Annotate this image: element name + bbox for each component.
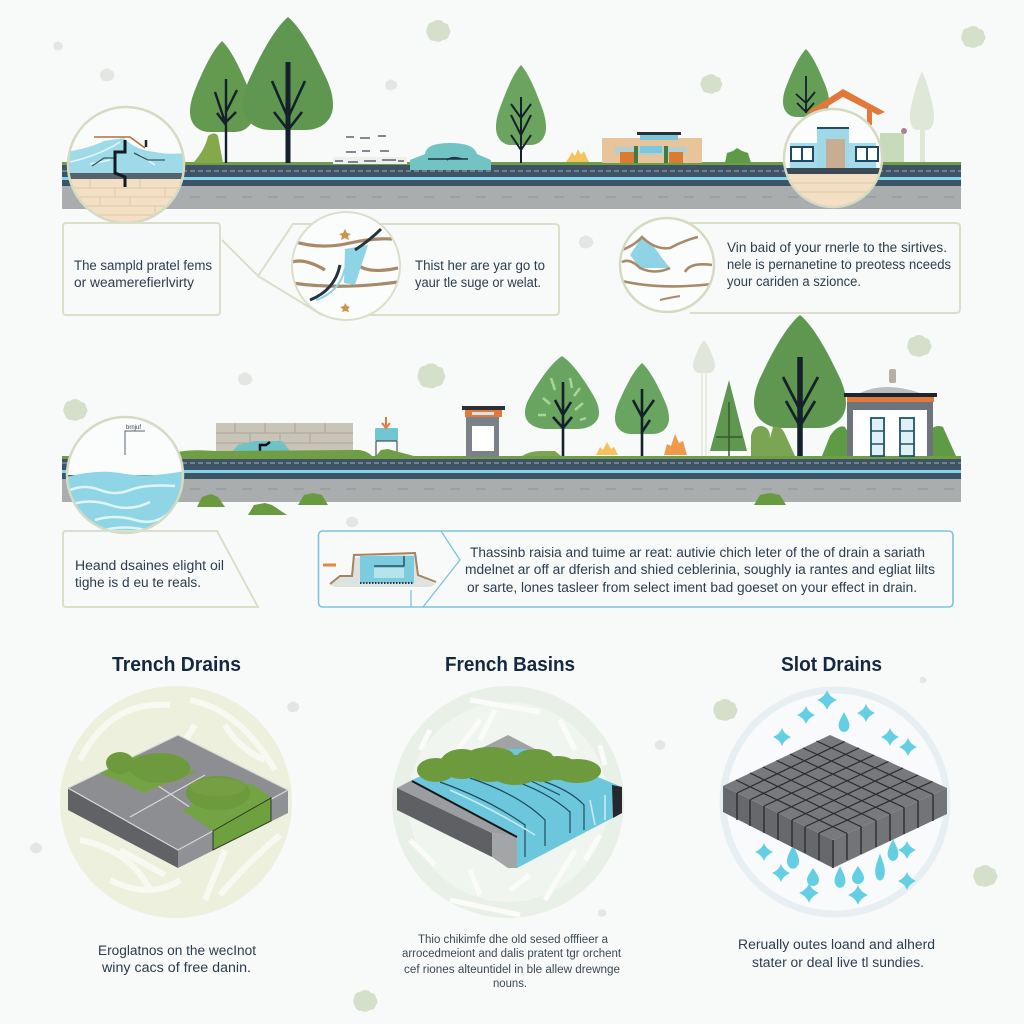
roadside bushes [197,493,786,515]
house [844,369,937,456]
swirl circle [392,686,624,918]
caption: arrocedmeiont and dalis pratent tgr orchent [402,948,622,960]
inset circle: water: brnjuf [126,425,141,431]
heading: Slot Drains [781,654,882,676]
inset circle: channel [290,210,402,322]
tree: pale [693,340,715,456]
box 3: callout with inset: your cariden a szionce. [727,274,861,289]
tree: left [190,41,254,163]
column: French Basins [392,654,624,990]
box 2: callout with pointer [222,210,559,322]
tree: triangle [710,380,747,456]
low building [602,132,702,163]
caption: stater or deal live tl sundies. [752,955,924,970]
orange roof [807,89,885,115]
scene 2 trees [522,315,956,456]
inset circle: water [66,416,184,534]
caption [402,934,622,990]
tree: big [754,315,846,456]
box 4: text callout: Heand dsaines elight oil [75,558,224,573]
teal mound [410,143,491,170]
box 1: text callout [63,223,220,315]
orange shrub [566,149,589,162]
green bush [725,148,751,163]
box 5: text callout with inset: or sarte, lones tasleer from select iment bad goeset on your effect in drain. [467,580,917,595]
box 5: text callout with inset: Thassinb raisia and tuime ar reat: autivie chich leter of the of drain a sariath [470,545,925,560]
caption: Rerually outes loand and alherd [738,937,935,952]
heading: Trench Drains [112,654,241,676]
caption: nouns. [493,978,527,990]
caption: Eroglatnos on the wecInot [98,943,256,958]
caption: Thio chikimfe dhe old sesed offfieer a [418,934,609,946]
isometric water channel [397,735,622,868]
box 3: callout with inset [618,216,960,314]
hedges [751,426,795,456]
water droplets [755,690,917,905]
box 2: callout with pointer: yaur tle suge or welat. [415,275,541,290]
brick wall with teal car [178,423,372,456]
box 1: text callout: The sampld pratel fems [74,258,212,273]
scene 1 trees [190,17,546,163]
small hedge [193,134,223,163]
isometric slot grate [723,735,947,868]
caption [98,943,256,975]
yellow and orange shrubs [596,442,618,455]
tree: tall [243,17,333,163]
caption: cef riones alteuntidel in ble allew drewnge [404,964,620,976]
caption: winy cacs of free danin. [101,960,251,975]
scene 1 right tree behind house [783,49,829,117]
icon: basin section [323,553,436,587]
inset circle: pond [618,216,716,314]
swirl circle [60,686,292,918]
box 3: callout with inset: Vin baid of your rnerle to the sirtives. [727,240,947,255]
tree: small round [615,363,669,456]
sketchy pile [333,136,407,164]
gate [462,406,505,457]
box 4: text callout: tighe is d eu te reals. [75,575,201,590]
ring circle [723,690,947,914]
box 1: text callout: or weamerefierlvirty [74,275,194,290]
sign with arrow [375,417,414,456]
heading: French Basins [445,654,575,676]
inset circle: house [784,109,882,208]
box 5: text callout with inset [318,531,953,607]
box 3: callout with inset: nele is pernanetine to preotess nceeds [727,257,951,272]
road strip 1 [62,162,961,209]
tree: leafy round [525,356,599,456]
bushes on channel [417,747,601,785]
inset circle: drain cross-section [66,105,186,225]
box 4: text callout [63,531,258,607]
caption [738,937,935,970]
road strip 2 [62,456,961,502]
box 5: text callout with inset: mdelnet ar off ar dferish and shied ceblerinia, soughly ia rantes and egliat lilts [465,562,935,577]
column: Slot Drains [723,654,947,970]
column: Trench Drains [60,654,292,975]
tree: middle [496,65,546,163]
box 2: callout with pointer: Thist her are yar go to [415,258,545,273]
isometric paved block [68,735,288,868]
pale tree and green box [880,72,934,162]
